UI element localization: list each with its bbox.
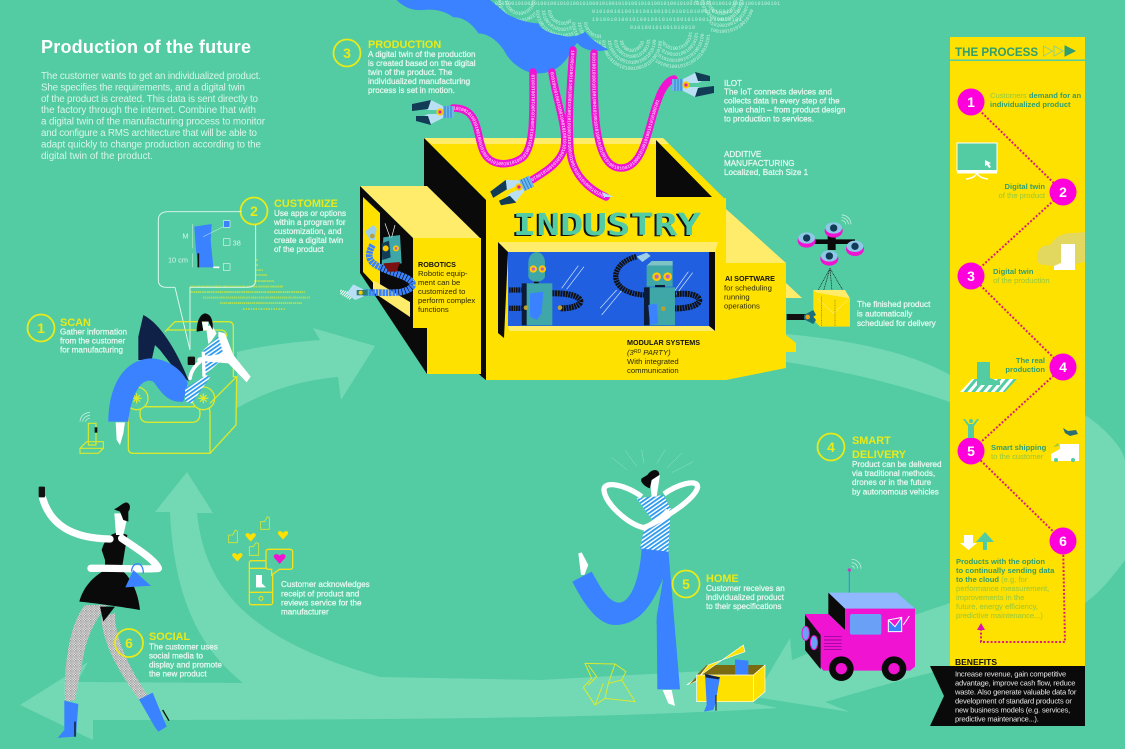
icon: delivery van and drones [1051, 428, 1079, 462]
blue trousers [108, 358, 188, 422]
arrow: scan to factory [237, 328, 375, 408]
caption: modular systems: communication [627, 366, 679, 375]
binary stream from phone: 0101001010 [254, 280, 274, 283]
binary data cloud: 0101001010010100100101010010100 [690, 0, 754, 33]
step 2: customize: 2 [250, 203, 258, 219]
caption: ILOT: The IoT connects devices and [724, 88, 832, 96]
icon: social likes on phone [229, 517, 293, 605]
binary stream from phone: 01010010100101001010001010010100101001010100101001010010100101 [190, 291, 305, 294]
step 1: scan: 1 [37, 320, 45, 336]
caption: customer acknowledges: reviews service for the [281, 598, 362, 608]
step 4: smart delivery [818, 434, 942, 496]
caption: AI software: AI SOFTWARE [725, 274, 775, 283]
binary stream from phone: 01010010100101001010001010010100101001010100101001010010 [203, 296, 310, 300]
step texts: of the production [993, 276, 1050, 285]
step 3: production: is created based on the digital [368, 59, 476, 68]
caption: robotics: ROBOTICS [418, 260, 456, 269]
step 1: scan: for manufacturing [60, 346, 123, 354]
caption: customer acknowledges: receipt of product and [281, 590, 359, 598]
step texts: individualized product [990, 100, 1071, 109]
intro text: adapt quickly to change production according to the [41, 139, 262, 150]
factory [360, 138, 802, 380]
caption: additive manufacturing: Localized, Batch Size 1 [724, 168, 809, 177]
binary data cloud: 10100101001010010010101001010001010010101 [592, 17, 742, 23]
step 6: social: social media to [149, 652, 203, 660]
step texts: Smart shipping [991, 443, 1047, 452]
process panel: 2 [1059, 184, 1067, 200]
step 3: production: PRODUCTION [368, 39, 441, 51]
step 6: social [115, 629, 222, 678]
binary data cloud: 0101001010010100101 [614, 39, 650, 58]
boots [58, 701, 78, 738]
intro text: digital twin of the product. [41, 151, 153, 162]
caption: ILOT: collects data in every step of the [724, 96, 840, 106]
legs [65, 605, 107, 702]
heading: Production of the future: Production of the future [41, 37, 251, 57]
step 1: scan [28, 314, 127, 354]
step 5: home: Customer receives an [706, 584, 785, 593]
text: 101001010010100100010100101010010101001010010100101000101001 [568, 50, 606, 198]
intro text: She specifies the requirements, and a digital twin [41, 82, 245, 93]
back leg shading [657, 578, 665, 623]
step 4: smart delivery: via traditional methods, [852, 469, 935, 478]
caption: robotics: Robotic equip- [418, 269, 468, 278]
binary data cloud: 0101001010010100100101010010100 [602, 40, 662, 70]
step 4: smart delivery: drones or in the future [852, 478, 932, 487]
intro text: the factory through the internet. Combine that with [41, 105, 256, 116]
caption: robotics: perform complex [418, 296, 475, 305]
caption: robotics [418, 260, 475, 314]
step texts: performance measurement, [956, 584, 1049, 593]
step 6: social: The customer uses [149, 642, 218, 652]
head [114, 513, 128, 535]
caption: AI software [724, 274, 775, 310]
left annex [360, 186, 480, 238]
binary data cloud: 0101001010010101 [584, 22, 602, 38]
step 2: customize: of the product [274, 245, 324, 254]
step texts: Digital twin [993, 267, 1034, 276]
step 6: social: display and promote [149, 660, 222, 670]
process panel: 6 [1059, 533, 1067, 549]
icon: smart speaker [80, 413, 103, 453]
dress [79, 532, 140, 610]
icon: up and down arrows [960, 532, 994, 550]
benefits: BENEFITS [955, 657, 997, 667]
drone with package [787, 215, 864, 327]
binary data cloud: 01010010100101001001010100101000101001010 [592, 9, 740, 15]
binary stream from phone: 01 [255, 264, 259, 267]
binary stream from phone [190, 259, 310, 311]
caption: customer acknowledges: Customer acknowledges [281, 580, 370, 589]
icon: wrapping paper [583, 663, 635, 705]
caption: modular systems: PARTY) [641, 348, 671, 357]
step 1: scan: SCAN [60, 317, 91, 329]
step 3: production: process is set in motion. [368, 86, 455, 95]
step 4: smart delivery: 4 [827, 439, 835, 455]
torso [203, 337, 227, 375]
step 4: smart delivery: by autonomous vehicles [852, 488, 939, 496]
process panel: 1 [967, 94, 975, 110]
caption: finished product: is automatically [857, 310, 913, 318]
caption: ILOT: value chain – from product design [724, 106, 845, 114]
caption: robotics: customized to [418, 287, 465, 296]
binary stream from phone: 0101 [255, 269, 263, 272]
binary data cloud: 101001010010100101 [662, 32, 692, 50]
step 5: home: to their specifications [706, 602, 782, 611]
speech bubble: product configurator: M [182, 232, 188, 241]
caption: modular systems: MODULAR SYSTEMS [627, 338, 700, 347]
step texts: future, energy efficiency, [956, 602, 1038, 611]
caption: customer acknowledges: manufacturer [281, 608, 329, 616]
caption: additive manufacturing [724, 150, 809, 177]
arms [197, 332, 251, 382]
armchair [125, 322, 237, 453]
step 4: smart delivery: Product can be delivered [852, 460, 942, 469]
binary data cloud: 01010010100101001001010100101 [572, 22, 578, 36]
binary stream from phone: 01010010100101001 [243, 308, 285, 311]
front of factory [486, 198, 726, 380]
text: 0101001010010100100010100101010010101001010010100101000101 [531, 72, 566, 182]
top [637, 495, 671, 552]
factory label: INDUSTRY [513, 208, 701, 243]
arrow: band leaving factory [786, 334, 950, 402]
caption: additive manufacturing: ADDITIVE [724, 150, 762, 159]
figure: woman on armchair [108, 313, 251, 453]
step 2: customize: customization, and [274, 227, 342, 236]
caption: modular systems: With integrated [627, 357, 679, 366]
benefits: predictive maintenance...). [955, 714, 1039, 724]
arrow: band towards home [755, 603, 950, 712]
binary data cloud: 010100101001010010 [630, 25, 695, 31]
handbag [125, 570, 152, 587]
binary data cloud: 0101001010010100100101010010100010100101010010101001010010100101001010010101010010100101 [495, 1, 780, 7]
step 3: production: A digital twin of the production [368, 50, 476, 59]
binary data cloud: 101001010010100100101 [578, 22, 602, 44]
robot 1 [509, 252, 580, 325]
arrow: lower band to left [20, 472, 778, 740]
speech bubble: product configurator: 10 cm [168, 256, 188, 265]
arrows: process [1044, 46, 1075, 56]
binary data cloud: 010100101001010010010101001010010101 [655, 34, 710, 68]
binary stream from phone: 010100101001010010100010100101001010010101001010010100 [190, 286, 283, 288]
step 1: scan: from the customer [60, 336, 126, 346]
neck and head [649, 475, 660, 497]
caption: modular systems [627, 338, 700, 375]
icon: cloud with boot [1037, 232, 1085, 270]
factory captions [418, 260, 775, 375]
process panel: 5 [967, 443, 975, 459]
neck and head [206, 325, 217, 344]
intro text [41, 71, 266, 162]
binary stream from phone: 010100 [255, 274, 267, 277]
icon: open shoebox with boot [687, 645, 765, 712]
benefits: Increase revenue, gain competitive [955, 670, 1066, 678]
main back / open top [424, 138, 726, 200]
caption: robotics: ment can be [418, 278, 460, 287]
right annex [726, 209, 786, 263]
step texts: Customers demand for an [990, 91, 1082, 100]
step 5: home: 5 [682, 576, 690, 592]
step texts: to the customer [991, 452, 1044, 461]
caption: AI software: running [724, 292, 750, 302]
benefits: advantage, improve cash flow, reduce [955, 678, 1075, 688]
robot 2 [616, 253, 699, 325]
gripper holding fabric [340, 284, 367, 300]
text: 01010010100101001000101001010100101010010100101001010001010010100101010100101 [592, 53, 660, 170]
step texts: improvements in the [956, 593, 1024, 602]
binary stream from phone: 0 [256, 259, 258, 262]
trousers [572, 548, 680, 689]
foot [116, 422, 125, 445]
step 4: smart delivery: DELIVERY [852, 449, 907, 461]
intro text: and configure a RMS architecture that will be able to [41, 128, 258, 139]
caption: modular systems: RD [634, 349, 641, 355]
intro text: a digital twin of the manufacturing process to monitor [41, 117, 266, 128]
step 6: social: SOCIAL [149, 631, 190, 643]
step 2: customize: Use apps or options [274, 209, 346, 218]
speech bubble: product configurator: 38 [233, 239, 241, 248]
caption: robotics: functions [418, 305, 449, 314]
step 6: social: the new product [149, 670, 207, 678]
step 1: scan: Gather information [60, 328, 127, 336]
caption: modular systems: (3 [627, 348, 634, 357]
caption: AI software: for scheduling [724, 284, 772, 292]
caption: finished product [857, 300, 937, 328]
window frame [498, 242, 718, 252]
caption: finished product: The finished product [857, 300, 931, 309]
step 2: customize: create a digital twin [274, 236, 343, 245]
step 3: production [334, 39, 476, 95]
caption: additive manufacturing: MANUFACTURING [724, 159, 795, 168]
step texts: to the cloud (e.g. for [956, 575, 1028, 584]
binary data cloud: 101001010010 [620, 40, 644, 52]
caption: AI software: operations [724, 302, 760, 310]
step texts: to continually sending data [956, 566, 1055, 575]
benefits: new business models (e.g. services, [955, 706, 1070, 714]
step 3: production: twin of the product. The [368, 68, 453, 77]
icon: 3D printing boot [960, 362, 1017, 392]
arrow: band right of process panel [1085, 415, 1125, 603]
intro text: The customer wants to get an individualized product. [41, 71, 261, 82]
step 2: customize: within a program for [273, 218, 346, 227]
step texts: Products with the option [956, 557, 1045, 566]
binary data cloud: 0101001010010100100101010010 [536, 10, 574, 36]
icon: monitor [957, 143, 997, 179]
step texts: production [1005, 365, 1045, 374]
robot in left annex [363, 223, 413, 293]
icon: person [963, 419, 979, 438]
step texts: predictive maintenance...) [956, 611, 1043, 620]
dotted process path [971, 102, 1065, 642]
caption: finished product: scheduled for delivery [857, 319, 937, 328]
heading: the process: THE PROCESS [955, 46, 1038, 59]
process panel: 4 [1059, 359, 1067, 375]
binary data cloud: 0101001010010101 [548, 10, 572, 25]
step 6: social: 6 [125, 635, 133, 651]
step 5: home: HOME [706, 573, 739, 585]
claws [412, 100, 454, 125]
benefits: waste. Also generate valuable data for [954, 688, 1077, 696]
dark leg [138, 315, 189, 382]
benefits: development of standard products or [955, 696, 1072, 706]
flow arrows [20, 328, 1125, 740]
speech bubble: product configurator [158, 212, 256, 350]
delivery truck [802, 559, 915, 681]
binary data cloud: 10100101001010010010101001 [695, 0, 748, 27]
numbered nodes [958, 88, 1076, 554]
step texts: Digital twin [1004, 182, 1045, 191]
benefits [930, 657, 1085, 726]
figure: selfie woman [39, 487, 169, 738]
step texts: of the product [999, 191, 1046, 200]
binary data cloud [495, 0, 780, 70]
caption: ILOT: ILOT [724, 79, 742, 88]
caption: customer acknowledges [281, 580, 370, 616]
cables [453, 50, 674, 197]
process panel [950, 37, 1085, 667]
caption: ILOT: to production to services. [724, 114, 814, 124]
package [813, 290, 850, 327]
step 5: home [672, 570, 785, 611]
boot [194, 224, 213, 267]
step 3: production: individualized manufacturing [368, 77, 470, 86]
process panel: 3 [967, 268, 975, 284]
gripper from factory [787, 310, 816, 324]
step 5: home: individualized product [706, 593, 785, 602]
joy rays [612, 450, 693, 473]
feet [578, 552, 588, 575]
step texts [956, 91, 1082, 620]
arms [604, 485, 668, 528]
robots in window [340, 223, 699, 325]
caption: ILOT [724, 79, 845, 124]
step 3: production: 3 [343, 45, 351, 61]
figure: dancing woman [572, 450, 698, 706]
text: 1010010100101001000101001010100101010010100101001010001010010100101010 [454, 74, 535, 166]
step 4: smart delivery: SMART [852, 435, 891, 447]
arms [43, 498, 110, 539]
cloud [397, 0, 608, 73]
step 2: customize [240, 198, 346, 254]
step 2: customize: CUSTOMIZE [274, 198, 338, 210]
intro text: of the product is created. This data is sent directly to [41, 94, 259, 105]
step texts: The real [1016, 356, 1045, 365]
binary stream from phone: 010100101001010010100010100101001010010100 [220, 302, 302, 305]
